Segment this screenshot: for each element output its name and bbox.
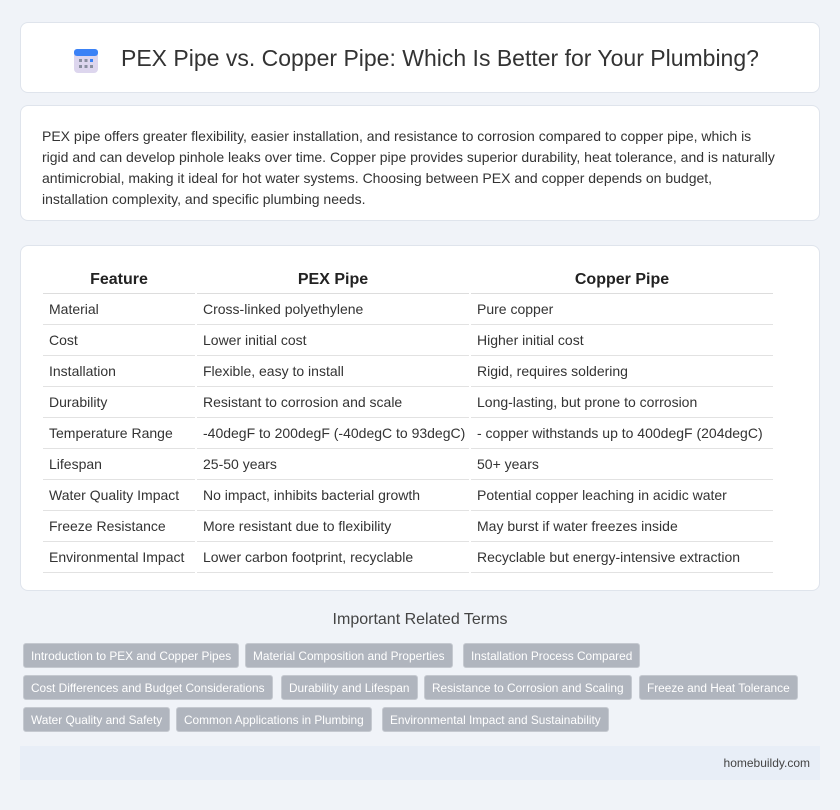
comparison table card [20,245,820,591]
comparison table: PEX Pipe [298,270,368,288]
comparison table: Material [49,301,99,317]
title: PEX Pipe vs. Copper Pipe: Which Is Better for Your Plumbing? [121,45,759,71]
related terms tags: Water Quality and Safety [31,713,162,727]
comparison table: Potential copper leaching in acidic water [477,487,727,503]
comparison table: May burst if water freezes inside [477,518,678,534]
comparison table: 50+ years [477,456,539,472]
comparison table: Lifespan [49,456,102,472]
comparison table: Durability [49,394,107,410]
header card [20,22,820,93]
comparison table: Environmental Impact [49,549,184,565]
related terms tags: Introduction to PEX and Copper Pipes [31,649,231,663]
related terms tags: Resistance to Corrosion and Scaling [432,681,624,695]
related terms tags: Installation Process Compared [471,649,632,663]
comparison table: More resistant due to flexibility [203,518,391,534]
related terms tags: Cost Differences and Budget Considerations [31,681,265,695]
related terms tags: Durability and Lifespan [289,681,410,695]
comparison table: Freeze Resistance [49,518,166,534]
comparison table: Temperature Range [49,425,173,441]
related terms tags: Material Composition and Properties [253,649,445,663]
comparison table: Cost [49,332,78,348]
comparison table: Higher initial cost [477,332,584,348]
related terms tags: Freeze and Heat Tolerance [647,681,790,695]
related terms tags: Environmental Impact and Sustainability [390,713,601,727]
comparison table: Installation [49,363,116,379]
footer [20,746,820,780]
comparison table: Lower carbon footprint, recyclable [203,549,413,565]
footer: homebuildy.com [724,756,810,770]
comparison table: Resistant to corrosion and scale [203,394,402,410]
comparison table: No impact, inhibits bacterial growth [203,487,420,503]
comparison table: 25-50 years [203,456,277,472]
comparison table: Flexible, easy to install [203,363,344,379]
comparison table: - copper withstands up to 400degF (204degC) [477,425,763,441]
related terms heading: Important Related Terms [333,611,507,628]
intro text card [20,105,820,221]
comparison table: Pure copper [477,301,553,317]
comparison table: Water Quality Impact [49,487,179,503]
intro paragraph: PEX pipe offers greater flexibility, easier installation, and resistance to corrosion compared to copper pipe, which is rigid and can develop pinhole leaks over time. Copper pipe provides superior durability, heat tolerance, and is naturally antimicrobial, making it ideal for hot water systems. Choosing between PEX and copper depends on budget, installation complexity, and specific plumbing needs. [42,128,775,207]
comparison table: Copper Pipe [575,270,669,288]
comparison table: Long-lasting, but prone to corrosion [477,394,697,410]
comparison table: Recyclable but energy-intensive extraction [477,549,740,565]
comparison table: Lower initial cost [203,332,306,348]
comparison table: Rigid, requires soldering [477,363,628,379]
comparison table: -40degF to 200degF (-40degC to 93degC) [203,425,465,441]
comparison table [43,270,773,573]
icon: calendar [74,49,98,73]
related terms tags: Common Applications in Plumbing [184,713,364,727]
comparison table: Feature [90,270,148,288]
comparison table: Cross-linked polyethylene [203,301,363,317]
